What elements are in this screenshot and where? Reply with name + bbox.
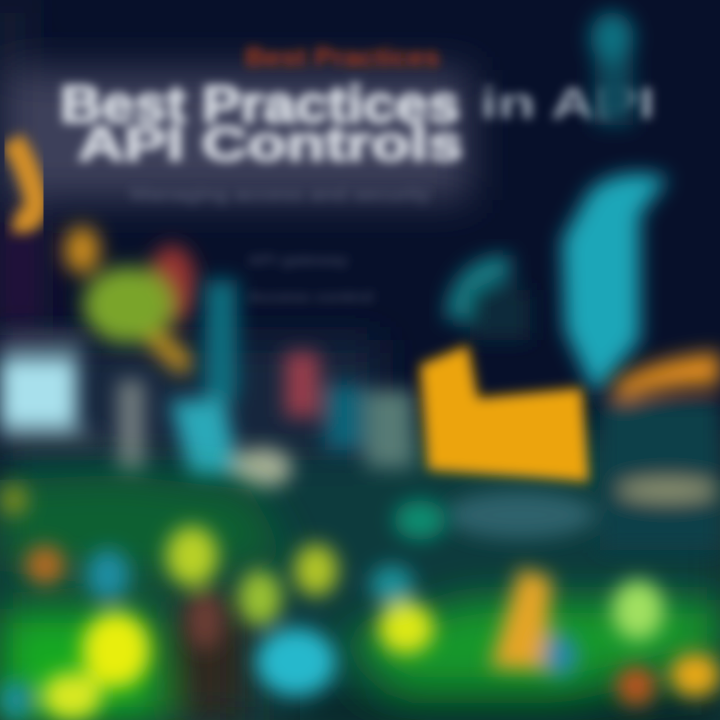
light: lime three [294,544,338,596]
eyebrow label: Best Practices [245,42,440,72]
light: amber spire [490,568,552,670]
subtitle: Managing access and security [130,184,430,204]
tower: teal [118,280,292,488]
light: yellow low [42,672,102,720]
small caption two: Access control [248,289,373,306]
light: pale green [612,580,664,640]
building: right [445,352,720,550]
light: lime one [166,526,218,586]
heading [60,42,655,306]
light: left edge [0,484,28,516]
light: red-orange [616,666,656,706]
light: cyan corner [0,680,32,720]
light: yellow large [82,612,150,688]
lower backdrop [0,480,720,720]
title panel [0,0,470,335]
icon: key-like diagonal [64,226,196,368]
light: teal upper [394,500,446,540]
light: orange left [25,545,65,585]
panel: light screen [0,335,100,446]
ground: green [0,475,720,720]
city lights [0,484,720,720]
tower: red and teal [285,352,414,468]
light: yellow center [378,602,434,654]
title line two: in API [480,79,655,128]
light: teal center [370,565,414,605]
ground haze [0,340,720,720]
tower: cyan [562,12,668,395]
light: lime two [238,570,282,626]
light: teal left [86,549,130,601]
lock shape: amber [420,345,590,482]
light: cyan large [256,628,336,696]
title line one: Best Practices [60,76,460,134]
light: red lower [187,590,223,650]
small caption: API gateway [248,252,349,269]
light: orange right [670,653,720,697]
arc: teal [458,268,530,340]
icon: orange squiggle [12,140,36,221]
light: blue right [542,633,578,677]
title line three: API Controls [78,118,463,171]
